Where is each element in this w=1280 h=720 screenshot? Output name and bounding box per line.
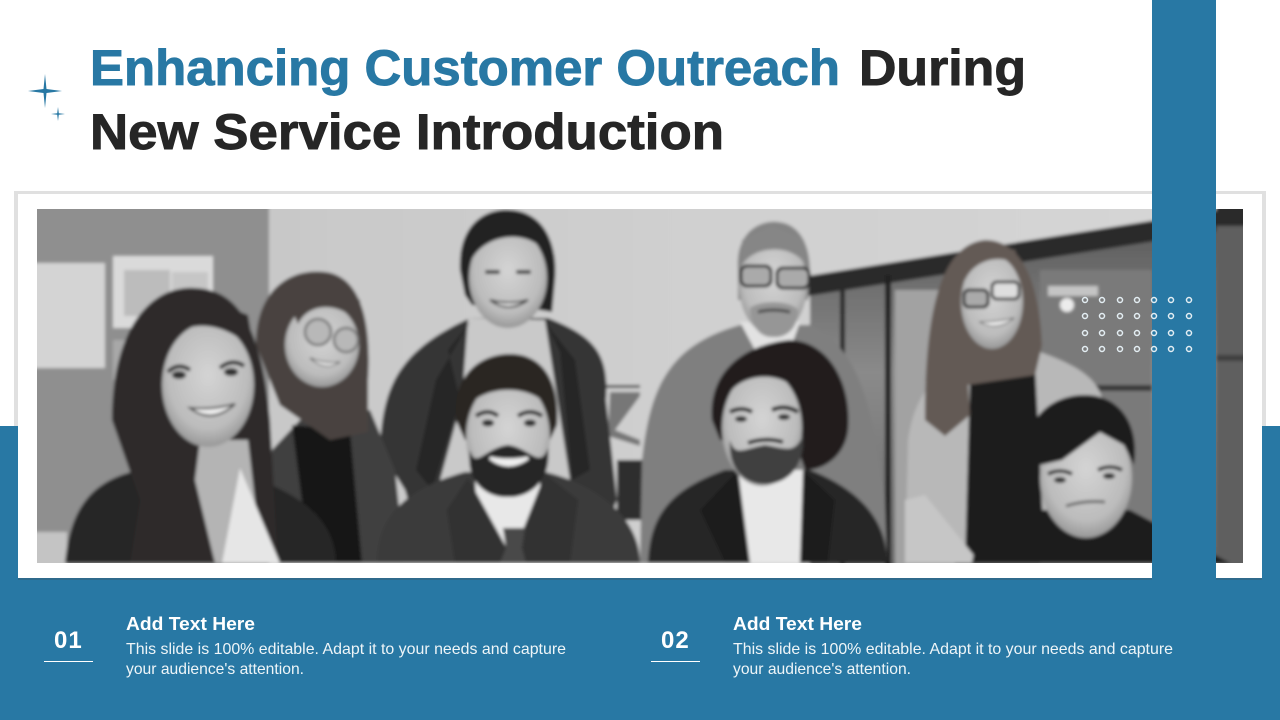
- title: Enhancing Customer Outreach: [90, 40, 840, 96]
- blue vertical strip: [1152, 0, 1216, 580]
- item 02 body text: your audience's attention.: [733, 661, 911, 678]
- item 02 body text: This slide is 100% editable. Adapt it to your needs and capture: [733, 641, 1173, 658]
- person: woman in light blazer: [905, 240, 1105, 563]
- person: rear man with grey hair and glasses: [640, 222, 887, 563]
- title: During: [859, 40, 1026, 96]
- blue background band: [0, 426, 1280, 720]
- item 02 heading: Add Text Here: [733, 614, 862, 634]
- person: woman with round glasses: [256, 272, 405, 563]
- item 01 body text: [126, 641, 566, 678]
- person: man with curly hair and dark suit: [648, 340, 887, 563]
- person: front man with beard and pinstripe suit: [377, 354, 640, 563]
- person: young man with dark fringe: [972, 395, 1230, 563]
- item 01 body text: This slide is 100% editable. Adapt it to your needs and capture: [126, 641, 566, 658]
- title: [90, 40, 1026, 160]
- item 01 body text: your audience's attention.: [126, 661, 304, 678]
- item 02: [651, 614, 1173, 678]
- person: rear man in dark jacket: [380, 210, 617, 540]
- title: New Service Introduction: [90, 104, 724, 160]
- item 02 body text: [733, 641, 1173, 678]
- icon: sparkle stars: [28, 74, 65, 121]
- panel: photo card: [14, 191, 1266, 580]
- person: front left woman: [65, 288, 336, 563]
- wall and office background: [30, 200, 1250, 570]
- item 01: [44, 614, 566, 678]
- number 02: 02: [661, 627, 690, 654]
- photo: team of eight colleagues: [30, 200, 1250, 570]
- number 01: 01: [54, 627, 83, 654]
- item 01 heading: Add Text Here: [126, 614, 255, 634]
- decorative dot grid: [1082, 298, 1192, 352]
